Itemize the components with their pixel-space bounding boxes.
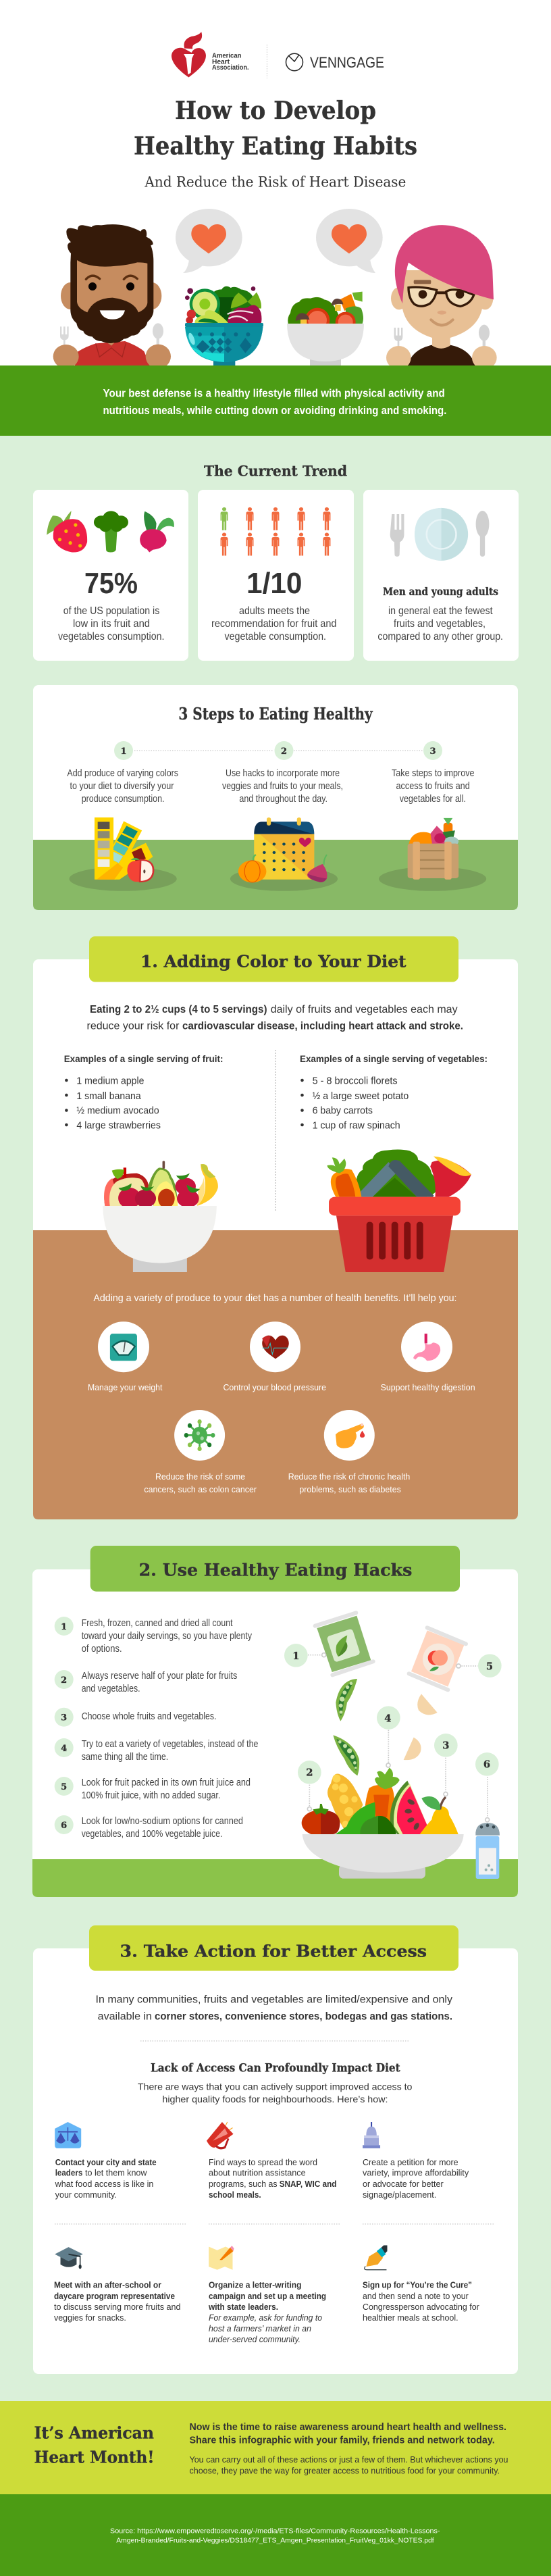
step 2: veggies and fruits to your meals,	[222, 780, 343, 792]
intro text	[96, 1994, 452, 2023]
logo: Venngage	[286, 53, 384, 71]
step 1: produce consumption.	[82, 793, 165, 805]
intro text: Eating 2 to 2½ cups (4 to 5 servings)	[90, 1004, 267, 1015]
hack 5: Look for fruit packed in its own fruit juice and	[82, 1777, 251, 1788]
action: contact leaders	[55, 2122, 157, 2200]
text block: recommendation for fruit and	[211, 618, 336, 630]
illustration: falling food into a bowl with numbered callouts: 6	[483, 1759, 490, 1771]
heading: It’s American	[34, 2423, 154, 2442]
hack 5: 5	[61, 1782, 67, 1792]
benefit: cancer risk	[144, 1410, 257, 1494]
action: spread the word	[207, 2122, 336, 2200]
step 3: 3	[429, 747, 436, 757]
hack 1: Fresh, frozen, canned and dried all count	[82, 1618, 232, 1629]
illustration: falling food into a bowl with numbered callouts	[284, 1613, 502, 1879]
benefit: chronic health	[288, 1410, 410, 1494]
list: vegetable servings: Examples of a single serving of vegetables:	[300, 1053, 488, 1064]
footer: source: Amgen-Branded/Fruits-and-Veggies/DS18477_ETS_Amgen_Presentation_FruitVeg_01kk_NOTES.pdf	[116, 2536, 434, 2544]
benefit: blood pressure	[223, 1321, 326, 1392]
step 2: Use hacks to incorporate more	[226, 767, 340, 779]
action: after-school program: daycare program representative	[54, 2292, 175, 2301]
title: How to Develop	[175, 97, 376, 125]
panel: header	[0, 0, 551, 436]
action: contact leaders: to let them know	[85, 2169, 147, 2178]
panel: men and young adults card	[363, 490, 519, 661]
illustration: falling food into a bowl with numbered callouts: 2	[306, 1767, 313, 1779]
action: after-school program: Meet with an after-school or	[54, 2281, 161, 2290]
illustration: falling food into a bowl with numbered callouts: 4	[384, 1713, 391, 1724]
sub text	[138, 2081, 413, 2104]
hack 1: toward your daily servings, so you have plenty	[82, 1631, 253, 1642]
action: spread the word: Find ways to spread the word	[209, 2158, 317, 2167]
step 2	[222, 741, 343, 805]
step 2: 2	[281, 747, 287, 757]
benefit: digestion	[381, 1321, 475, 1392]
hack 5: 100% fruit juice, with no added sugar.	[82, 1790, 220, 1801]
action: you're the cure: and then send a note to your	[363, 2292, 469, 2301]
action: contact leaders: leaders	[55, 2169, 82, 2178]
pictogram: ten people	[221, 507, 330, 556]
action: contact leaders: your community.	[55, 2190, 117, 2200]
hack 4	[55, 1738, 258, 1763]
action: contact leaders: what food access is like in	[55, 2179, 153, 2189]
illustration: falling food into a bowl with numbered callouts: 1	[292, 1650, 299, 1662]
illustration: bearded man with salad bowl	[53, 209, 263, 369]
illustration: fruit bowl	[103, 1161, 218, 1272]
footer: source: Source: https://www.empoweredtoserve.org/-/media/ETS-files/Community-Resources/Health-Lessons-	[110, 2527, 440, 2535]
illustration: falling food into a bowl with numbered callouts: 3	[442, 1740, 449, 1752]
sub text: higher quality foods for neighbourhoods. Here’s how:	[162, 2094, 388, 2104]
action: create a petition	[363, 2122, 469, 2200]
action: you're the cure: Sign up for “You’re the Cure”	[363, 2281, 472, 2290]
step 3	[392, 741, 474, 805]
list: fruit servings: 1 medium apple	[76, 1076, 144, 1086]
title	[134, 97, 417, 161]
text block	[211, 605, 336, 642]
step 2: and throughout the day.	[239, 793, 327, 805]
hack 4: 4	[61, 1744, 67, 1754]
intro text: daily of fruits and vegetables each may	[271, 1004, 458, 1015]
intro text: In many communities, fruits and vegetables are limited/expensive and only	[96, 1994, 452, 2005]
illustration: woman with pink hair and salad bowl	[287, 209, 497, 370]
logo: American Heart Association: Association.	[212, 64, 249, 72]
intro text	[86, 1004, 463, 1032]
step 1: Add produce of varying colors	[67, 767, 178, 779]
hack 2: and vegetables.	[82, 1684, 140, 1694]
heading: 3 Steps to Eating Healthy	[178, 704, 373, 724]
hack 6	[55, 1815, 243, 1840]
benefit: manage weight	[88, 1321, 163, 1392]
hack 6: 6	[61, 1821, 67, 1831]
banner heading: 1. Adding Color to Your Diet	[140, 952, 406, 971]
text block: compared to any other group.	[377, 631, 503, 642]
banner heading: 2. Use Healthy Eating Hacks	[139, 1560, 412, 1580]
step 3: vegetables for all.	[400, 793, 466, 805]
step 3: access to fruits and	[396, 780, 470, 792]
heading: Heart Month!	[34, 2448, 154, 2467]
panel: 1. adding color to your diet	[33, 936, 518, 1519]
stat: 75%: 75%	[84, 567, 138, 600]
text block: vegetables consumption.	[58, 631, 165, 642]
step 3: Take steps to improve	[392, 767, 474, 779]
logo: Venngage: VENNGAGE	[310, 54, 384, 71]
text block: adults meets the	[239, 605, 310, 617]
hack 2	[55, 1670, 237, 1694]
illustrations: colour palette, calendar, crate	[70, 817, 486, 891]
logo: American Heart Association: Heart	[212, 58, 230, 66]
banner heading	[90, 1546, 460, 1592]
panel: 3 steps to eating healthy	[33, 685, 518, 910]
text block	[377, 605, 503, 642]
benefit: chronic health: Reduce the risk of chronic health	[288, 1471, 410, 1482]
list: fruit servings: Examples of a single serving of fruit:	[64, 1053, 223, 1064]
intro text: corner stores, convenience stores, bodegas and gas stations.	[155, 2011, 452, 2023]
action: spread the word: about nutrition assistance	[209, 2169, 306, 2178]
list: vegetable servings: 1 cup of raw spinach	[313, 1120, 400, 1131]
action: contact leaders: Contact your city and state	[55, 2158, 157, 2167]
list: fruit servings: ½ medium avocado	[76, 1106, 159, 1117]
text block: vegetable consumption.	[224, 631, 326, 642]
action: letter writing campaign: under-served community.	[209, 2335, 300, 2344]
illustration: vegetable basket	[327, 1149, 471, 1272]
hack 4: Try to eat a variety of vegetables, instead of the	[82, 1739, 258, 1750]
banner heading	[89, 936, 458, 982]
hack 2: Always reserve half of your plate for fruits	[82, 1671, 237, 1682]
action: you're the cure	[363, 2246, 479, 2323]
benefit: digestion: Support healthy digestion	[381, 1382, 475, 1392]
action: after-school program	[54, 2247, 181, 2323]
intro text: cardiovascular disease, including heart attack and stroke.	[182, 1020, 463, 1032]
list: vegetable servings: 5 - 8 broccoli florets	[313, 1076, 398, 1086]
text block	[189, 2422, 508, 2475]
logo: American Heart Association	[172, 32, 249, 77]
hack 6: vegetables, and 100% vegetable juice.	[82, 1829, 222, 1840]
icon: fork plate spoon	[390, 508, 489, 561]
action: create a petition: signage/placement.	[363, 2190, 436, 2200]
title: Healthy Eating Habits	[134, 132, 417, 161]
benefit: cancer risk: cancers, such as colon cancer	[144, 1484, 257, 1494]
text block: choose, they pave the way for greater access to nutritious food for your community.	[189, 2466, 500, 2475]
action: you're the cure: Congressperson advocating for	[363, 2302, 479, 2312]
hack 3: 3	[61, 1713, 67, 1723]
subheading: Lack of Access Can Profoundly Impact Diet	[151, 2062, 400, 2075]
panel: American Heart Month call to action	[0, 2401, 551, 2494]
action: create a petition: Create a petition for more	[363, 2158, 458, 2167]
step 1	[67, 741, 178, 805]
action: create a petition: variety, improve affordability	[363, 2169, 469, 2178]
heading: The Current Trend: The Current Trend	[204, 462, 347, 480]
panel: green intro banner: nutritious meals, while cutting down or avoiding drinking and smoking.	[103, 404, 446, 417]
action: letter writing campaign: Organize a letter-writing	[209, 2281, 301, 2290]
panel: 3. take action for better access	[33, 1925, 518, 2374]
action: spread the word: SNAP, WIC and	[280, 2179, 336, 2189]
intro text: reduce your risk for	[86, 1020, 180, 1032]
hack 3	[55, 1708, 217, 1727]
action: create a petition: or advocate for better	[363, 2179, 444, 2189]
benefit: chronic health: problems, such as diabetes	[299, 1484, 401, 1494]
step 1: to your diet to diversify your	[70, 780, 174, 792]
action: after-school program: to discuss serving more fruits and	[54, 2302, 181, 2312]
text block: of the US population is	[63, 605, 159, 617]
hack 1: of options.	[82, 1644, 122, 1655]
hack 2: 2	[61, 1675, 67, 1686]
text: benefits intro: Adding a variety of produce to your diet has a number of health benefits. It’ll help you:	[93, 1292, 456, 1304]
hack 3: Choose whole fruits and vegetables.	[82, 1711, 217, 1722]
icons: strawberry, broccoli, beet	[47, 511, 174, 553]
panel: 1/10 stat card	[198, 490, 354, 661]
heading: Men and young adults	[383, 585, 498, 598]
action: letter writing campaign: host a farmers’ market in an	[209, 2324, 311, 2333]
benefit: blood pressure: Control your blood pressure	[223, 1382, 326, 1392]
panel: green intro banner: Your best defense is a healthy lifestyle filled with physical activity and	[103, 386, 445, 400]
hack 1: 1	[61, 1622, 67, 1632]
footer: source	[0, 2494, 551, 2576]
text block: You can carry out all of these actions or just a few of them. But whichever actions you	[189, 2455, 508, 2465]
banner heading	[89, 1925, 458, 1971]
list: fruit servings: 4 large strawberries	[76, 1120, 161, 1131]
list: vegetable servings	[300, 1053, 488, 1131]
benefit: cancer risk: Reduce the risk of some	[155, 1471, 245, 1482]
text block: fruits and vegetables,	[394, 618, 486, 630]
text block: in general eat the fewest	[388, 605, 493, 617]
illustration: falling food into a bowl with numbered callouts: 5	[486, 1661, 493, 1672]
heading	[34, 2423, 154, 2467]
action: letter writing campaign: with state leaders.	[208, 2302, 278, 2312]
list: vegetable servings: ½ a large sweet potato	[313, 1091, 409, 1102]
sub text: There are ways that you can actively support improved access to	[138, 2081, 413, 2092]
action: you're the cure: healthier meals at school.	[363, 2313, 458, 2323]
list: fruit servings	[64, 1053, 223, 1131]
hack 4: same thing all the time.	[82, 1752, 168, 1763]
benefit: manage weight: Manage your weight	[88, 1382, 163, 1392]
action: after-school program: veggies for snacks.	[54, 2313, 126, 2323]
step 1: 1	[120, 747, 127, 757]
list: fruit servings: 1 small banana	[76, 1091, 142, 1102]
text block: Share this infographic with your family, friends and network today.	[189, 2435, 495, 2446]
text block: low in its fruit and	[73, 618, 150, 630]
panel: 75 percent stat card	[33, 490, 188, 661]
banner heading: 3. Take Action for Better Access	[120, 1942, 427, 1961]
hack 5	[55, 1777, 251, 1801]
stat: 1/10: 1/10	[246, 567, 303, 600]
panel: 2. use healthy eating hacks	[32, 1546, 518, 1897]
hack 1	[55, 1617, 253, 1655]
action: spread the word: programs, such as	[209, 2179, 278, 2189]
action: letter writing campaign: campaign and set up a meeting	[209, 2292, 326, 2301]
intro text: available in	[98, 2011, 152, 2023]
hack 6: Look for low/no-sodium options for canned	[82, 1816, 243, 1827]
action: letter writing campaign: For example, ask for funding to	[209, 2313, 322, 2323]
panel: green intro banner	[0, 365, 551, 436]
text block: Now is the time to raise awareness around heart health and wellness.	[189, 2422, 506, 2433]
list: vegetable servings: 6 baby carrots	[313, 1106, 373, 1117]
action: spread the word: school meals.	[209, 2190, 261, 2200]
action: letter writing campaign	[208, 2246, 326, 2344]
subtitle: And Reduce the Risk of Heart Disease	[144, 174, 406, 191]
text block	[58, 605, 165, 642]
logo: American Heart Association: American	[212, 53, 242, 59]
